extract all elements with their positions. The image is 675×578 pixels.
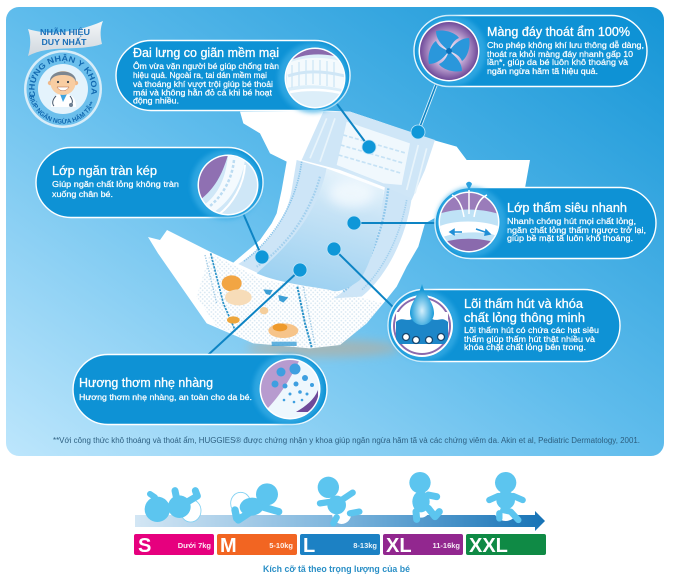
panel: fast absorption layer: [435, 182, 656, 258]
text block: Nhanh chóng hút mọi chất lỏng,: [507, 216, 636, 226]
text block: ngăn ngừa hăm tã hiệu quả.: [487, 66, 598, 76]
text block: xuống chân bé.: [52, 189, 113, 199]
text block: khóa chặt chất lỏng bên trong.: [464, 342, 586, 352]
text block: [464, 325, 599, 352]
icon: waistband closeup: [278, 43, 348, 113]
badge ribbon text: DUY NHẤT: [42, 37, 87, 47]
text block: Giúp ngăn chất lỏng không tràn: [52, 179, 179, 189]
size XXL: XXL: [469, 535, 508, 557]
size L: [300, 534, 380, 557]
icon: baby walking on hands: [318, 477, 359, 524]
icon: pinwheel: [416, 16, 486, 86]
bear prints: [222, 275, 242, 291]
diaper shadow: [247, 340, 400, 357]
size S: S: [138, 535, 151, 557]
badge circular text: CHỨNG NHẬN Y KHOA: [29, 54, 97, 98]
text block: mái và không hằn đỏ cả khi bé hoạt: [133, 88, 273, 98]
heading: Hương thơm nhẹ nhàng: [79, 375, 213, 390]
text block: thoát ra khỏi màng đáy nhanh gấp 10: [487, 49, 633, 59]
text block: ngăn chất lỏng thấm ngược trở lại,: [507, 225, 646, 235]
text block: lần*, giúp da bé luôn khô thoáng và: [487, 57, 628, 67]
size M: 5-10kg: [269, 541, 293, 550]
left leg cuff: [238, 160, 327, 273]
heading: Lớp ngăn tràn kép: [52, 163, 157, 178]
text block: hiệu quả. Ngoài ra, tai dán mềm mại: [133, 70, 267, 80]
text block: Cho phép không khí lưu thông dễ dàng,: [487, 40, 644, 50]
callout: core leader line and dot: [327, 242, 395, 309]
panel: blue background: [6, 7, 664, 456]
size L: L: [303, 535, 315, 557]
text block: [507, 216, 646, 243]
panel: double leak guard: [36, 148, 263, 220]
size XL: [383, 534, 463, 557]
icon: absorption layers: [436, 182, 506, 257]
icon: leak guard closeup: [191, 150, 261, 220]
diaper body: [148, 111, 530, 348]
footnote: **Với công thức khô thoáng và thoát ẩm, HUGGIES® được chứng nhận y khoa giúp ngăn ngừa hăm tã và các chứng viêm da. Akin et al, Pediatric Dermatology, 2001.: [53, 436, 640, 445]
size M: [217, 534, 297, 557]
panel: breathable back sheet: [414, 16, 647, 86]
text block: thấm giúp thấm hút thật nhiều và: [464, 334, 595, 344]
heading: [464, 296, 585, 325]
text block: động nhiều.: [133, 96, 179, 106]
right leg cuff: [333, 187, 412, 298]
panel: absorbent core: [388, 284, 620, 362]
badge: sole certified brand: GIÚP NGĂN NGỪA HĂM TÃ**: [29, 94, 92, 124]
badge ribbon text: NHÃN HIỆU: [40, 28, 90, 37]
icon: doctor: [48, 71, 78, 107]
babies by size: [145, 472, 523, 524]
text block: [52, 179, 179, 199]
heading: Lõi thấm hút và khóa: [464, 296, 584, 311]
heading: Màng đáy thoát ẩm 100%: [487, 24, 630, 39]
callout: scent leader line and dot: [208, 263, 307, 355]
size XL: 11-16kg: [432, 541, 460, 550]
panel: gentle scent: [73, 354, 327, 424]
waistband pleats: [337, 122, 410, 185]
waistband: [302, 112, 435, 200]
icon: flowers: [253, 354, 323, 424]
icon: baby standing: [409, 472, 439, 519]
text block: Lõi thấm hút có chứa các hạt siêu: [464, 325, 599, 335]
diaper illustration: [148, 111, 530, 357]
size chart: [134, 534, 546, 557]
growth arrow: [135, 511, 545, 531]
icon: droplet and beads: [389, 284, 459, 361]
callout: surge layer leader line and dot: [347, 216, 438, 230]
badge seal: [24, 50, 102, 128]
absorbent core: [257, 168, 384, 291]
badge: sole certified brand: [24, 21, 103, 128]
front flap pattern: [197, 253, 383, 348]
caption: Kích cỡ tã theo trọng lượng của bé: [263, 564, 410, 575]
text block: và thoáng khí vượt trội giúp bé thoải: [133, 79, 273, 89]
text block: [487, 40, 644, 76]
size S: Dưới 7kg: [178, 541, 211, 550]
heading: Lớp thấm siêu nhanh: [507, 200, 627, 215]
icon: baby crawling: [231, 483, 279, 520]
heading: chất lỏng thông minh: [464, 310, 585, 325]
text block: giúp bề mặt tã luôn khô thoáng.: [507, 233, 633, 243]
size S: [134, 534, 214, 557]
icon: baby lying: [145, 491, 201, 522]
badge ribbon text: [40, 28, 90, 47]
text block: Hương thơm nhẹ nhàng, an toàn cho da bé.: [79, 392, 252, 402]
callout: waist leader line and dot: [337, 104, 376, 154]
text block: [133, 61, 279, 106]
butterflies: [263, 289, 288, 303]
heading: Đai lưng co giãn mềm mại: [133, 45, 279, 60]
callout: back sheet leader line and dot: [411, 85, 436, 139]
size XL: XL: [386, 535, 412, 557]
text block: Ôm vừa vặn người bé giúp chống tràn: [133, 61, 279, 71]
size L: 8-13kg: [353, 541, 377, 550]
arrows: [452, 190, 487, 217]
callout: leak guard leader line and dot: [243, 213, 269, 264]
icon: baby toddler: [489, 472, 523, 521]
size M: M: [220, 535, 237, 557]
panel: elastic waistband: [116, 40, 350, 113]
size XXL: [466, 534, 546, 557]
badge ribbon: [28, 21, 103, 56]
